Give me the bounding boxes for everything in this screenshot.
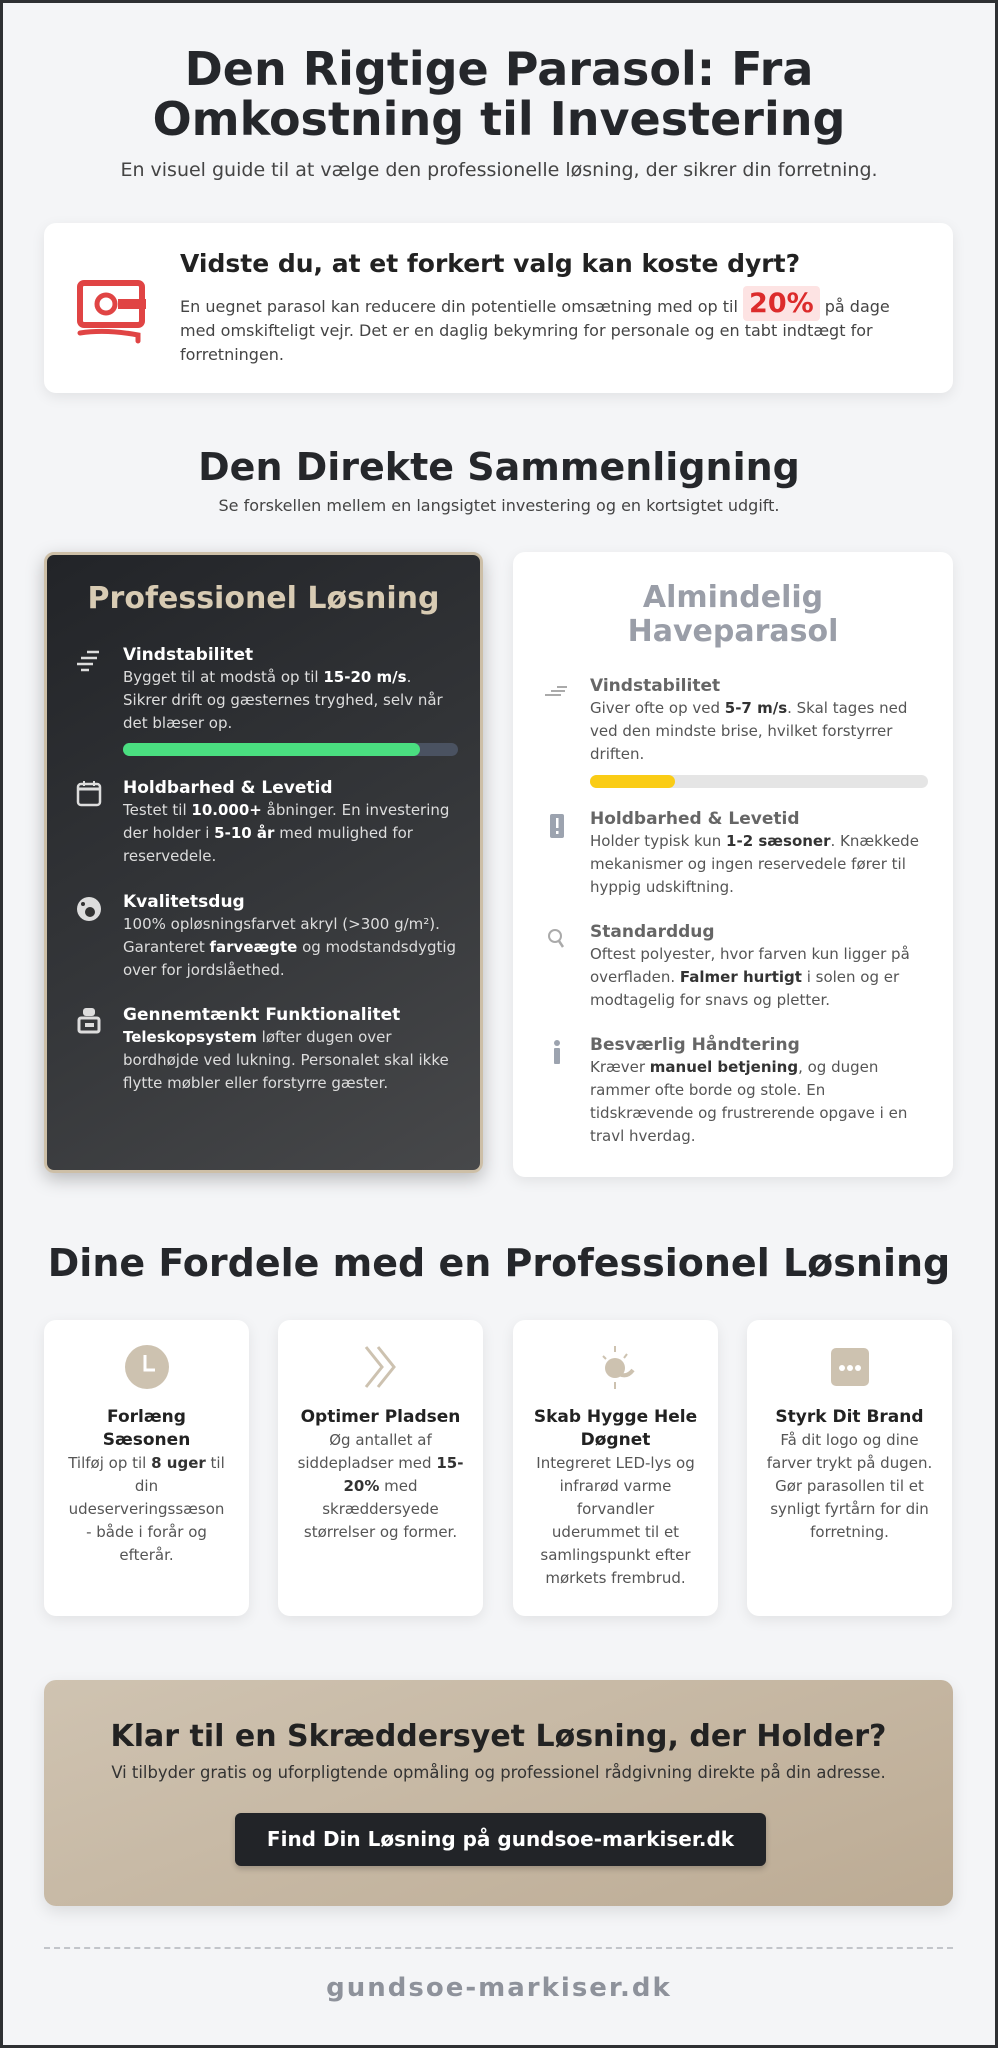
footer: gundsoe-markiser.dk	[326, 1973, 672, 2003]
comparison subtitle: Se forskellen mellem en langsigtet investering og en kortsigtet udgift.	[218, 496, 780, 515]
benefit text: Optimer Pladsen	[301, 1407, 460, 1427]
item: durability	[76, 778, 449, 865]
alert text: En uegnet parasol kan reducere din potentielle omsætning med op til 20% på dage med omskifteligt vejr. Det er en daglig bekymring for personale og en tabt indtægt for forretningen.	[180, 288, 890, 364]
benefit text: Forlæng Sæsonen	[103, 1407, 190, 1450]
benefit text: Tilføj op til 8 uger til din udeserveringssæson - både i forår og efterår.	[68, 1454, 225, 1564]
benefit text	[68, 1407, 225, 1564]
item: handling: Besværlig Håndtering	[590, 1035, 800, 1055]
item: wind	[545, 676, 907, 763]
title: Den Rigtige Parasol: Fra	[185, 42, 813, 96]
icon: warning	[550, 814, 564, 838]
icon: chat	[831, 1348, 869, 1386]
item: wind: Vindstabilitet	[123, 645, 253, 665]
title: Omkostning til Investering	[153, 92, 845, 146]
pro title: Professionel Løsning	[88, 581, 439, 616]
benefit: cozy	[513, 1320, 718, 1616]
icon: info	[554, 1040, 560, 1064]
item: wind	[77, 645, 443, 732]
benefit text: Styrk Dit Brand	[775, 1407, 924, 1427]
item: fabric: Oftest polyester, hvor farven kun ligger på overfladen. Falmer hurtigt i solen og er modtagelig for snavs og pletter.	[590, 945, 910, 1009]
icon: sun moon	[602, 1346, 634, 1389]
benefit: season	[44, 1320, 249, 1616]
benefit: space	[278, 1320, 483, 1616]
benefit: brand	[747, 1320, 952, 1616]
icon: magnifier	[548, 929, 564, 948]
icon: calendar	[76, 781, 102, 806]
subtitle: En visuel guide til at vælge den professionelle løsning, der sikrer din forretning.	[120, 159, 878, 181]
item: functionality	[78, 1005, 449, 1092]
icon: money	[77, 280, 146, 344]
bar: wind pro	[123, 743, 458, 756]
item: fabric	[548, 922, 910, 1009]
benefit text: Øg antallet af siddepladser med 15-20% med skræddersyede størrelser og former.	[298, 1431, 463, 1541]
benefit text: Skab Hygge Hele Døgnet	[534, 1407, 697, 1450]
cta text: Vi tilbyder gratis og uforpligtende opmåling og professionel rådgivning direkte på din adresse.	[111, 1763, 886, 1782]
item: wind: Vindstabilitet	[590, 676, 720, 696]
title	[153, 42, 845, 146]
icon: palette	[77, 897, 101, 921]
item: durability: Holder typisk kun 1-2 sæsoner. Knækkede mekanismer og ingen reservedele fører til hyppig udskiftning.	[590, 832, 919, 896]
heading: benefits: Dine Fordele med en Professionel Løsning	[48, 1241, 950, 1285]
icon: chevrons	[365, 1346, 396, 1388]
standard title: Almindelig	[643, 580, 823, 615]
benefit text: Få dit logo og dine farver trykt på dugen. Gør parasollen til et synligt fyrtårn for din forretning.	[767, 1431, 932, 1541]
item: durability	[550, 809, 919, 896]
heading: comparison: Den Direkte Sammenligning	[198, 445, 800, 489]
item: fabric	[77, 892, 456, 979]
item: durability: Holdbarhed & Levetid	[123, 778, 332, 798]
cta heading: Klar til en Skræddersyet Løsning, der Holder?	[111, 1719, 886, 1754]
standard title	[628, 580, 838, 649]
item: functionality: Gennemtænkt Funktionalitet	[123, 1005, 400, 1025]
item: fabric: Kvalitetsdug	[123, 892, 245, 912]
item: wind: Bygget til at modstå op til 15-20 m/s. Sikrer drift og gæsternes tryghed, selv når det blæser op.	[123, 668, 443, 732]
item: fabric: Standarddug	[590, 922, 715, 942]
panel: call to action	[44, 1680, 953, 1906]
alert heading: Vidste du, at et forkert valg kan koste dyrt?	[180, 249, 800, 278]
item: fabric: 100% opløsningsfarvet akryl (>300 g/m²). Garanteret farveægte og modstandsdygtig over for jordslåethed.	[123, 915, 456, 979]
benefit text: Integreret LED-lys og infrarød varme forvandler uderummet til et samlingspunkt efter mørkets frembrud.	[536, 1454, 695, 1587]
item: handling: Kræver manuel betjening, og dugen rammer ofte borde og stole. En tidskrævende og frustrerende opgave i en travl hverdag.	[590, 1058, 907, 1145]
cta button	[235, 1813, 766, 1866]
panel: standard parasol	[513, 552, 953, 1177]
item: durability: Holdbarhed & Levetid	[590, 809, 800, 829]
bar: wind standard	[590, 775, 928, 788]
item: durability: Testet til 10.000+ åbninger. En investering der holder i 5-10 år med mulighed for reservedele.	[123, 801, 449, 865]
icon: wind	[77, 650, 99, 672]
standard title: Haveparasol	[628, 614, 838, 649]
icon: clock	[125, 1345, 169, 1389]
icon: wind small	[545, 686, 567, 696]
item: wind: Giver ofte op ved 5-7 m/s. Skal tages ned ved den mindste brise, hvilket forstyrrer driften.	[590, 699, 907, 763]
panel: professional solution	[44, 552, 483, 1173]
cta button: Find Din Løsning på gundsoe-markiser.dk	[267, 1827, 734, 1851]
icon: telescope	[78, 1008, 100, 1034]
panel: alert card	[44, 223, 953, 393]
item: functionality: Teleskopsystem løfter dugen over bordhøjde ved lukning. Personalet skal ikke flytte møbler eller forstyrre gæster.	[123, 1028, 449, 1092]
